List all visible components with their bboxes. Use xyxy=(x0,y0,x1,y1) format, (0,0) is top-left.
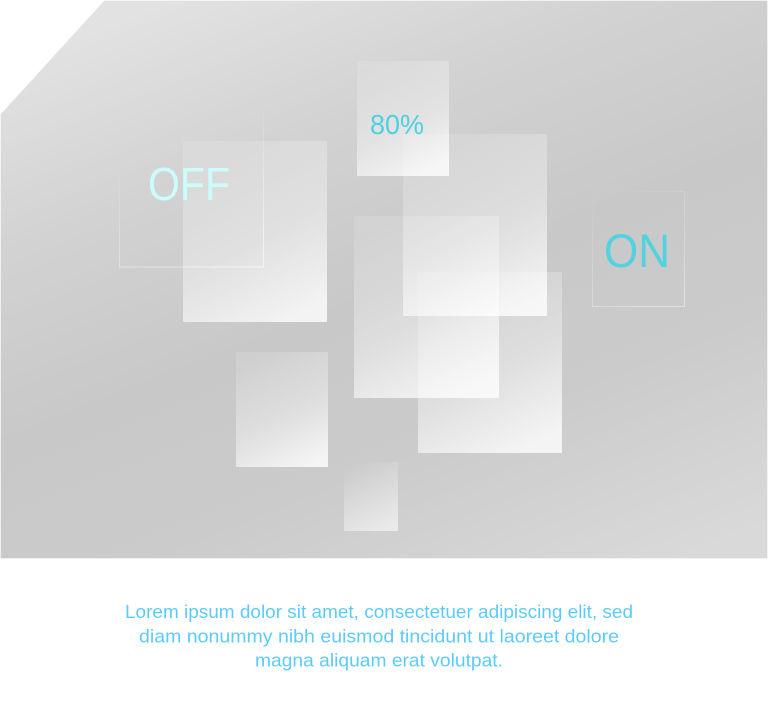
glass card: centre xyxy=(354,216,499,398)
caption text: Lorem ipsum dolor sit amet, consectetuer adipiscing elit, sed xyxy=(125,601,633,622)
caption text: diam nonummy nibh euismod tincidunt ut laoreet dolore xyxy=(139,626,619,646)
glass card: upper centre right xyxy=(403,134,547,316)
glass card: left large xyxy=(183,141,327,322)
label: ON: ON xyxy=(604,224,670,277)
label: 80%: 80% xyxy=(370,109,424,140)
background panel with cut corner xyxy=(0,0,768,558)
glass card: 80% xyxy=(357,61,449,176)
glass card: lower right xyxy=(418,272,562,453)
caption text xyxy=(125,601,633,670)
glass card: small bottom xyxy=(344,462,398,531)
glass card: lower left xyxy=(236,352,328,467)
caption text: magna aliquam erat volutpat. xyxy=(255,650,503,670)
label: OFF: OFF xyxy=(148,158,230,210)
glass card: ON outline xyxy=(592,192,684,306)
glass card: OFF outline xyxy=(120,95,264,267)
